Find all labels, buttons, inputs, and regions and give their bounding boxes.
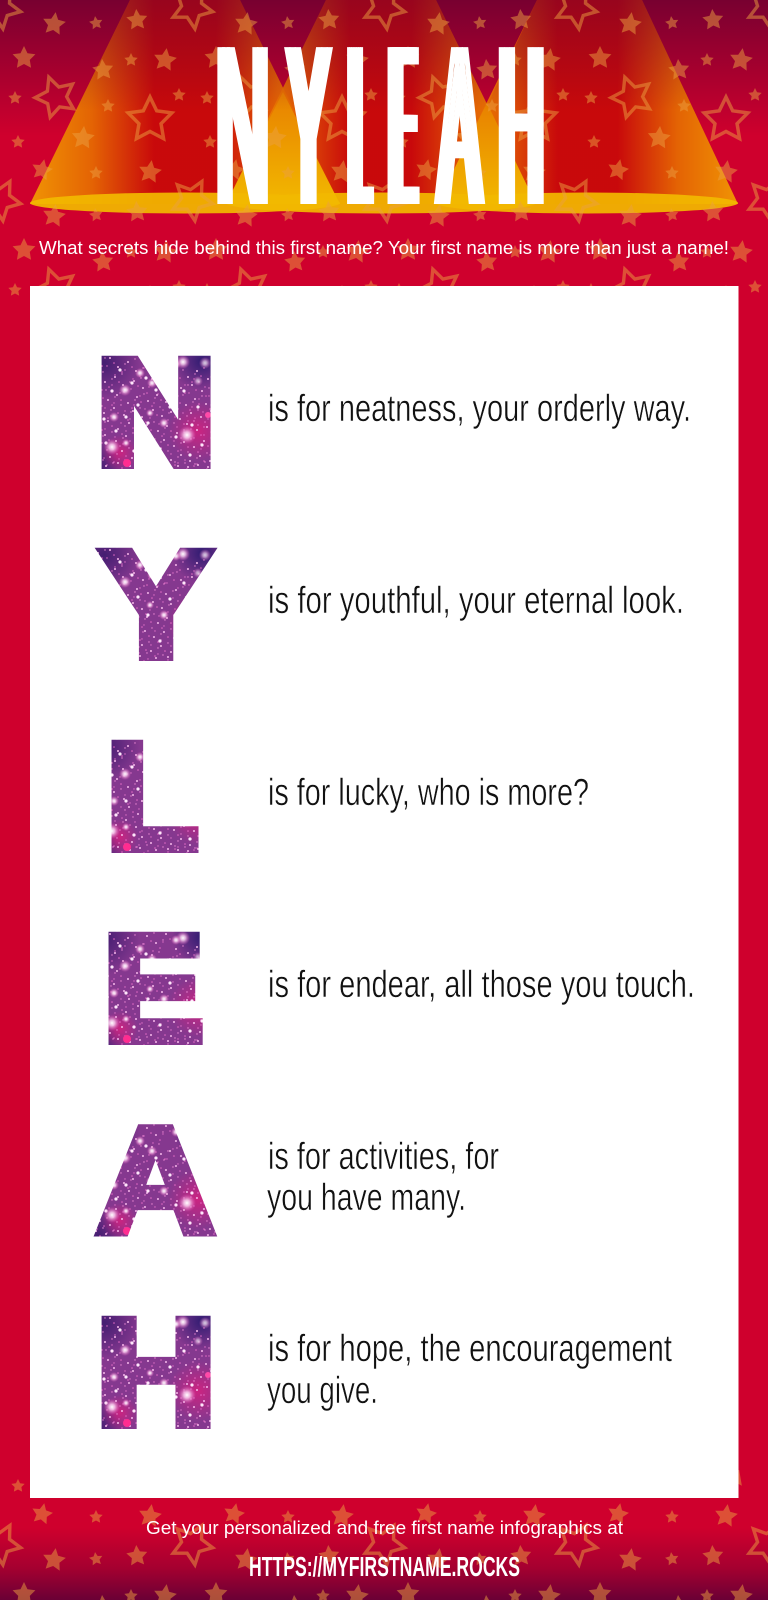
letter E: E — [104, 904, 204, 1072]
overlap: right — [437, 103, 536, 204]
spotlight floor: right — [436, 192, 738, 214]
description: A: is for activities, for — [268, 1136, 499, 1178]
description: L: is for lucky, who is more? — [268, 772, 589, 814]
description: A: you have many. — [267, 1177, 466, 1219]
spotlights — [30, 0, 738, 214]
description: A — [267, 1136, 499, 1219]
footer url: HTTPS://MYFIRSTNAME.ROCKS — [249, 1551, 520, 1582]
letter L: L — [106, 712, 198, 880]
spotlight floor: middle — [226, 192, 536, 214]
overlap: left — [226, 92, 340, 204]
star pattern: top — [0, 0, 768, 302]
title: N — [216, 0, 269, 253]
spotlight: middle cone — [226, 0, 536, 204]
title: A — [439, 0, 480, 253]
letter N: N — [96, 329, 216, 496]
footer text: Get your personalized and free first name infographics at — [146, 1518, 623, 1538]
title: E — [390, 0, 414, 253]
spotlight: left cone — [30, 0, 340, 204]
title: L — [351, 0, 369, 253]
description: H: you give. — [267, 1370, 378, 1412]
star pattern: bottom — [0, 1470, 768, 1600]
title — [216, 0, 544, 253]
spotlight top shade — [76, 0, 694, 110]
subtitle: What secrets hide behind this first name? Your first name is more than just a name! — [39, 238, 729, 258]
letter A: A — [96, 1097, 215, 1265]
letter H: H — [96, 1289, 216, 1456]
letter Y: Y — [102, 521, 211, 689]
title: Y — [288, 0, 329, 253]
title: H — [499, 0, 544, 253]
spotlight: right cone — [437, 0, 738, 204]
descriptions — [267, 388, 695, 1412]
spotlight floor: left — [30, 192, 340, 214]
description: H — [267, 1328, 672, 1412]
panel: white card — [30, 286, 738, 1498]
